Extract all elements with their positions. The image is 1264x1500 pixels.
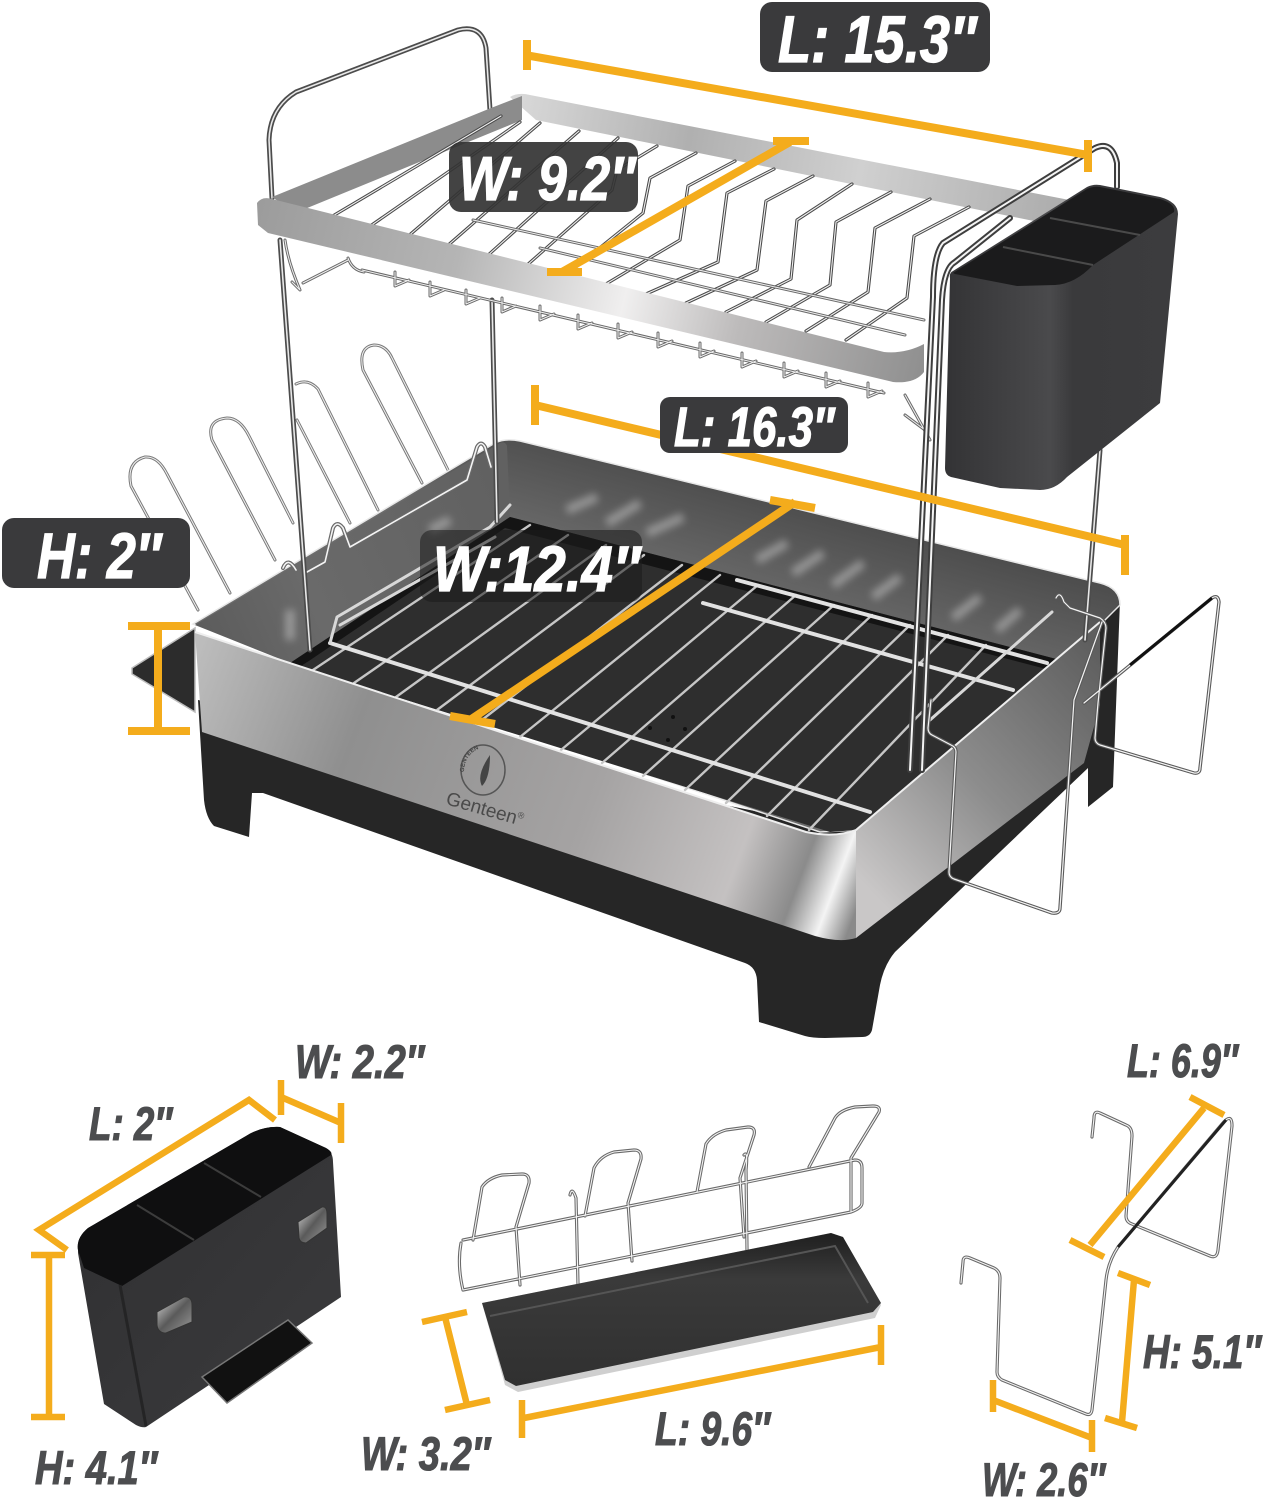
side drip tray — [132, 628, 195, 712]
rack grid wires — [313, 505, 1052, 830]
accessory: long drip tray — [482, 1233, 881, 1392]
label: W 12.4: W:12.4″ — [433, 533, 642, 605]
caddy body — [945, 185, 1178, 490]
drain holes — [648, 715, 687, 742]
wire plate holders — [130, 345, 448, 610]
caddy knob left — [157, 1297, 192, 1333]
logo: Genteen — [444, 789, 519, 829]
label: L 9.6: L: 9.6″ — [655, 1402, 772, 1455]
logo: ® — [516, 810, 526, 821]
front bar — [257, 198, 924, 382]
main caddy — [945, 185, 1178, 490]
caddy small tray — [202, 1320, 312, 1403]
caddy knob right — [298, 1207, 327, 1243]
accessory: utensil caddy — [78, 1127, 341, 1427]
right side wire hook — [928, 595, 1219, 913]
label: L 15.3: L: 15.3″ — [778, 2, 978, 76]
logo — [444, 744, 526, 829]
right posts — [910, 146, 1117, 770]
back and left posts with handle — [269, 29, 1100, 650]
left rail — [272, 96, 522, 213]
logo: GENTEEN — [460, 745, 478, 772]
dimension: W 12.4 line — [450, 500, 815, 724]
back wall highlight streaks — [290, 497, 1020, 640]
tray left wall — [195, 442, 510, 667]
dimension: L 16.3 line — [535, 385, 1125, 575]
label: W 9.2: W: 9.2″ — [459, 145, 637, 214]
label: W 3.2: W: 3.2″ — [361, 1427, 492, 1480]
label: L 2: L: 2″ — [89, 1097, 174, 1150]
back rail — [510, 94, 1090, 232]
caddy opening — [953, 187, 1174, 286]
hook dimension lines — [993, 1097, 1224, 1452]
caddy opening — [78, 1127, 331, 1286]
dimension: W 9.2 line — [547, 141, 809, 272]
steel right face — [856, 622, 1100, 938]
tray dimension lines — [422, 1312, 881, 1438]
tray floor — [300, 517, 1060, 832]
accessory: plate holder rack — [459, 1106, 879, 1290]
label: H 2: H: 2″ — [37, 520, 163, 592]
dimension: L 15.3 line — [525, 40, 1088, 172]
label: W 2.2: W: 2.2″ — [295, 1035, 426, 1088]
dimension: H 2 line — [128, 626, 190, 731]
tray rim highlight — [195, 622, 1100, 835]
label: H 4.1: H: 4.1″ — [35, 1441, 159, 1494]
ribs — [285, 116, 969, 440]
accessory: wire hook — [961, 1112, 1232, 1414]
tray inside back wall — [193, 440, 1120, 832]
black base with feet — [198, 600, 1120, 1038]
upper rack — [257, 94, 1117, 770]
main product: lower tray — [128, 344, 1121, 1038]
caddy dimension lines — [31, 1080, 341, 1417]
plate holder rail on tray — [283, 397, 491, 572]
steel front face — [195, 632, 856, 940]
label: L 16.3: L: 16.3″ — [674, 395, 836, 458]
